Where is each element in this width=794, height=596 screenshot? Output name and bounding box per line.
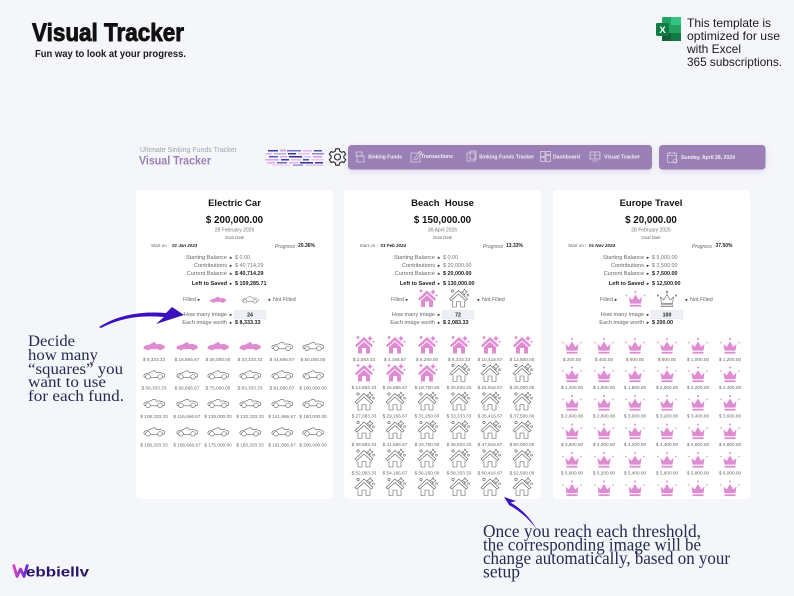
legend: filled and not filled: Not Filled: [690, 297, 713, 303]
start date: 01 Feb 2024: [380, 243, 407, 248]
panel: europe travel: [553, 190, 750, 499]
car icon grid: $ 8,333.33: [143, 357, 165, 362]
balance summary: $ 130,000.00: [443, 281, 474, 287]
balance summary: ►: [646, 271, 650, 276]
crown icon grid: $ 200.00: [563, 357, 582, 362]
house icon grid: $ 33,333.33: [447, 414, 472, 418]
progress: 37.50%: [716, 243, 733, 249]
image count input: Each image worth: [390, 320, 435, 326]
start date: Start on :: [568, 243, 586, 248]
balance summary: [394, 255, 474, 287]
crown icon grid: $ 5,000.00: [561, 470, 583, 476]
house icon grid: $ 14,583.33: [352, 385, 377, 390]
legend: filled and not filled: Not Filled: [273, 297, 296, 303]
car icon grid: $ 183,333.33: [236, 442, 264, 448]
house icon grid: $ 8,333.33: [448, 357, 470, 362]
crown icon grid: $ 1,600.00: [593, 385, 615, 390]
crown icon grid: $ 2,600.00: [561, 414, 583, 418]
car icon grid: $ 133,333.33: [236, 414, 264, 419]
balance summary: ►: [229, 271, 233, 276]
nav item: visual tracker: Visual Tracker: [604, 154, 640, 160]
car icon grid: $ 58,333.33: [142, 386, 167, 390]
callout: threshold explanation: the corresponding image will be: [483, 534, 701, 554]
callout: threshold explanation: setup: [483, 562, 520, 582]
image count input: $ 8,333.33: [235, 320, 260, 326]
image count input: 72: [455, 313, 461, 319]
house icon grid: $ 25,000.00: [510, 385, 535, 390]
progress: Progress :: [483, 244, 506, 250]
balance summary: $ 20,000.00: [443, 263, 471, 269]
car icon grid: $ 116,666.67: [173, 414, 201, 419]
nav item: transactions: Transactions: [421, 154, 453, 160]
crown icon grid: $ 3,800.00: [561, 442, 583, 447]
crown icon grid: $ 3,000.00: [624, 414, 646, 418]
legend: filled and not filled: [391, 289, 505, 307]
icon: settings gear: [329, 149, 346, 165]
crown icon grid: $ 4,600.00: [687, 442, 709, 447]
crown icon grid: $ 600.00: [626, 357, 645, 362]
crown icon grid: $ 1,400.00: [561, 385, 583, 390]
crown icon grid: $ 2,200.00: [687, 385, 709, 390]
balance summary: Current Balance: [187, 271, 227, 277]
crown icon grid: $ 400.00: [595, 357, 614, 362]
house icon grid: $ 2,083.33: [353, 357, 375, 362]
goal date: Goal Date: [641, 235, 661, 240]
image count input: Each image worth: [599, 320, 644, 326]
image count input: ►: [437, 312, 441, 317]
house icon grid: $ 56,250.00: [415, 470, 440, 476]
balance summary: ►: [646, 263, 650, 268]
panel: electric car: [136, 190, 333, 499]
legend: filled and not filled: Filled: [600, 297, 613, 303]
nav item: sinking funds tracker: Sinking Funds Tracker: [479, 154, 534, 160]
house icon grid: $ 18,750.00: [415, 385, 440, 390]
balance summary: Contributions: [611, 263, 644, 269]
callout: decide how many squares: want to use: [28, 374, 106, 391]
panel title: Europe Travel: [620, 198, 682, 209]
goal date: [631, 228, 671, 240]
arrow: points to image count: [99, 307, 184, 328]
house icon grid: $ 22,916.67: [478, 385, 503, 390]
legend: filled and not filled: ►: [405, 297, 409, 302]
tracker heading: [139, 145, 237, 168]
balance summary: $ 20,000.00: [443, 271, 471, 277]
balance summary: ►: [437, 255, 441, 260]
balance summary: ►: [437, 263, 441, 268]
balance summary: Left to Saved: [192, 281, 228, 287]
crown icon grid: $ 5,600.00: [656, 470, 678, 476]
crown icon grid: $ 3,600.00: [719, 414, 741, 418]
start date: Start on :: [360, 243, 378, 248]
balance summary: ►: [646, 281, 650, 286]
house icon grid: $ 4,166.67: [384, 357, 406, 362]
balance summary: $ 5,000.00: [652, 255, 677, 261]
car icon grid: $ 100,000.00: [299, 386, 327, 390]
callout: decide how many squares: [28, 333, 124, 405]
house icon grid: $ 47,916.67: [478, 442, 503, 447]
excel notice text: with Excel: [686, 42, 741, 56]
callout: threshold explanation: [483, 521, 730, 582]
house icon grid: $ 6,250.00: [416, 357, 438, 362]
crown icon grid: $ 3,400.00: [687, 414, 709, 418]
crown icon grid: $ 2,400.00: [719, 385, 741, 390]
crown icon grid: [561, 338, 741, 496]
image count input: How many image: [184, 312, 227, 318]
balance summary: $ 0.00: [443, 255, 458, 261]
crown icon grid: $ 4,200.00: [624, 442, 646, 447]
house icon grid: $ 27,083.33: [352, 414, 377, 418]
legend: filled and not filled: Filled: [183, 297, 196, 303]
date text: Sunday, April 28, 2024: [681, 155, 735, 161]
image count input: ►: [437, 320, 441, 325]
start date: [151, 243, 198, 248]
progress: 20.36%: [298, 243, 316, 249]
goal amount: $ 200,000.00: [206, 215, 264, 226]
crown icon grid: $ 5,800.00: [687, 470, 709, 476]
image count input: 24: [247, 313, 253, 319]
car icon grid: $ 125,000.00: [204, 414, 232, 419]
balance summary: $ 2,500.00: [652, 263, 677, 269]
car icon grid: $ 158,333.33: [140, 442, 168, 448]
balance summary: Starting Balance: [394, 255, 435, 261]
start date: [568, 243, 616, 248]
goal date: 28 February 2026: [215, 228, 254, 234]
balance summary: Current Balance: [395, 271, 435, 277]
balance summary: Starting Balance: [603, 255, 644, 261]
house icon grid: $ 54,166.67: [383, 470, 408, 476]
house icon grid: $ 52,083.33: [352, 470, 377, 476]
legend: filled and not filled: ◄: [476, 297, 480, 302]
goal date: 28 February 2025: [631, 228, 671, 234]
house icon grid: $ 12,500.00: [510, 357, 535, 362]
image count input: ►: [646, 320, 650, 325]
nav item: sinking funds tracker: [467, 151, 534, 161]
car icon grid: $ 41,666.67: [270, 357, 295, 362]
logo: webbiellv: [14, 564, 89, 580]
goal date: Goal Date: [225, 235, 245, 240]
crown icon grid: $ 4,800.00: [719, 442, 741, 447]
subtitle: Fun way to look at your progress.: [35, 49, 186, 60]
arrow: points to threshold image: [504, 497, 536, 529]
callout: decide how many squares: for each fund.: [28, 388, 124, 405]
balance summary: Left to Saved: [609, 281, 645, 287]
house icon grid: $ 60,416.67: [478, 470, 503, 476]
house icon grid: $ 43,750.00: [415, 442, 440, 447]
car icon grid: $ 83,333.33: [238, 386, 263, 390]
legend: filled and not filled: Filled: [391, 297, 404, 303]
car icon grid: $ 50,000.00: [301, 357, 326, 362]
crown icon grid: $ 5,200.00: [593, 470, 615, 476]
car icon grid: $ 108,333.33: [140, 414, 168, 419]
tracker heading: Ultimate Sinking Funds Tracker: [140, 145, 237, 154]
excel notice text: [686, 16, 782, 69]
crown icon grid: $ 5,400.00: [624, 470, 646, 476]
image count input: [390, 310, 474, 326]
legend: filled and not filled: [600, 291, 713, 307]
balance summary: $ 7,500.00: [652, 271, 677, 277]
legend: filled and not filled: Not Filled: [482, 297, 505, 303]
excel notice text: This template is: [687, 16, 771, 30]
image count input: Each image worth: [182, 320, 227, 326]
balance summary: Contributions: [194, 263, 227, 269]
house icon grid: $ 20,833.33: [447, 385, 472, 390]
house icon grid: $ 58,333.33: [447, 470, 472, 476]
panel: beach house: [344, 190, 541, 499]
balance summary: ►: [229, 263, 233, 268]
image count input: [599, 310, 683, 326]
balance summary: Contributions: [402, 263, 435, 269]
nav item: dashboard: [540, 152, 580, 162]
house icon grid: [352, 336, 535, 496]
crown icon grid: $ 1,200.00: [719, 357, 741, 362]
callout: decide how many squares: “squares” you: [28, 361, 123, 378]
nav item: dashboard: Dashboard: [553, 154, 580, 160]
car icon grid: $ 33,333.33: [238, 357, 263, 362]
crown icon grid: $ 1,800.00: [624, 385, 646, 390]
crown icon grid: $ 800.00: [658, 357, 677, 362]
date pill: [659, 145, 766, 170]
excel notice text: optimized for use: [687, 29, 780, 43]
navigation bar: [348, 145, 652, 170]
balance summary: ►: [229, 281, 233, 286]
progress: [483, 243, 524, 250]
image count input: ►: [229, 312, 233, 317]
excel notice text: 365 subscriptions.: [687, 55, 782, 69]
icon: excel logo: [656, 17, 681, 41]
callout: threshold explanation: Once you reach each threshold,: [483, 521, 701, 541]
image count input: $ 200.00: [652, 320, 673, 326]
balance summary: ►: [437, 271, 441, 276]
balance summary: $ 40,714.29: [235, 263, 263, 269]
goal amount: $ 20,000.00: [625, 215, 677, 226]
house icon grid: $ 41,666.67: [383, 442, 408, 447]
car icon grid: $ 191,666.67: [268, 442, 296, 448]
image count input: ►: [646, 312, 650, 317]
title: Visual Tracker: [32, 19, 184, 47]
crown icon grid: $ 2,000.00: [656, 385, 678, 390]
balance summary: Current Balance: [604, 271, 644, 277]
car icon grid: [140, 342, 327, 448]
balance summary: Left to Saved: [400, 281, 436, 287]
balance summary: $ 40,714.29: [235, 271, 263, 277]
crown icon grid: $ 4,400.00: [656, 442, 678, 447]
tracker heading: Visual Tracker: [139, 154, 211, 168]
car icon grid: $ 200,000.00: [299, 442, 327, 448]
house icon grid: $ 45,833.33: [447, 442, 472, 447]
house icon grid: $ 39,583.33: [352, 442, 377, 447]
house icon grid: $ 10,416.67: [478, 357, 503, 362]
balance summary: [603, 255, 680, 287]
legend: filled and not filled: ◄: [267, 297, 271, 302]
image count input: $ 2,083.33: [443, 320, 468, 326]
crown icon grid: $ 6,000.00: [719, 470, 741, 476]
crown icon grid: $ 1,000.00: [687, 357, 709, 362]
legend: filled and not filled: [183, 296, 296, 303]
goal date: 30 April 2026: [428, 228, 457, 234]
house icon grid: $ 31,250.00: [415, 414, 440, 418]
car icon grid: $ 141,666.67: [268, 414, 296, 419]
progress: Progress :: [275, 244, 298, 250]
progress: [275, 243, 316, 250]
car icon grid: $ 75,000.00: [206, 386, 231, 390]
start date: 01 Nov 2024: [589, 243, 616, 248]
icon: calendar: [668, 152, 677, 163]
glitched banner graphic: [265, 150, 324, 166]
house icon grid: $ 50,000.00: [510, 442, 535, 447]
balance summary: Starting Balance: [186, 255, 227, 261]
image count input: 100: [663, 313, 671, 319]
start date: [360, 243, 407, 248]
nav item: sinking funds: [356, 152, 402, 162]
house icon grid: $ 29,166.67: [383, 414, 408, 418]
progress: [692, 243, 733, 250]
logo: webbiellv: ebbiellv: [26, 564, 89, 580]
crown icon grid: $ 3,200.00: [656, 414, 678, 418]
goal date: Goal Date: [433, 235, 453, 240]
callout: decide how many squares: how many: [28, 347, 98, 364]
image count input: [182, 310, 266, 326]
house icon grid: $ 35,416.67: [478, 414, 503, 418]
balance summary: $ 12,500.00: [652, 281, 680, 287]
goal amount: $ 150,000.00: [414, 215, 472, 226]
crown icon grid: $ 2,800.00: [593, 414, 615, 418]
house icon grid: $ 62,500.00: [510, 470, 535, 476]
car icon grid: $ 91,666.67: [270, 386, 295, 390]
car icon grid: $ 25,000.00: [206, 357, 231, 362]
image count input: How many image: [392, 312, 435, 318]
car icon grid: $ 175,000.00: [204, 442, 232, 448]
start date: 01 Jan 2023: [172, 243, 198, 248]
goal date: [428, 228, 457, 240]
car icon grid: $ 166,666.67: [173, 442, 201, 448]
car icon grid: $ 66,666.67: [175, 386, 200, 390]
progress: Progress :: [692, 244, 715, 250]
progress: 13.33%: [506, 243, 524, 249]
nav item: transactions: [411, 151, 453, 162]
legend: filled and not filled: ►: [197, 297, 201, 302]
start date: Start on :: [151, 243, 169, 248]
car icon grid: $ 150,000.00: [299, 414, 327, 419]
image count input: ►: [229, 320, 233, 325]
image count input: How many image: [601, 312, 644, 318]
house icon grid: $ 37,500.00: [510, 414, 535, 418]
goal date: [215, 228, 254, 240]
legend: filled and not filled: ►: [614, 297, 618, 302]
callout: decide how many squares: Decide: [28, 333, 75, 350]
balance summary: $ 0.00: [235, 255, 250, 261]
panel title: Beach House: [411, 198, 474, 209]
balance summary: ►: [229, 255, 233, 260]
icon: excel logo: X: [659, 25, 666, 36]
legend: filled and not filled: ◄: [684, 297, 688, 302]
callout: threshold explanation: change automatically, based on your: [483, 548, 730, 568]
crown icon grid: $ 4,000.00: [593, 442, 615, 447]
balance summary: ►: [437, 281, 441, 286]
nav item: sinking funds: Sinking Funds: [368, 154, 402, 160]
balance summary: [186, 255, 266, 287]
car icon grid: $ 16,666.67: [175, 357, 200, 362]
balance summary: ►: [646, 255, 650, 260]
nav item: visual tracker: [590, 152, 640, 161]
house icon grid: $ 16,666.67: [383, 385, 408, 390]
balance summary: $ 159,285.71: [235, 281, 266, 287]
panel title: Electric Car: [208, 198, 261, 209]
